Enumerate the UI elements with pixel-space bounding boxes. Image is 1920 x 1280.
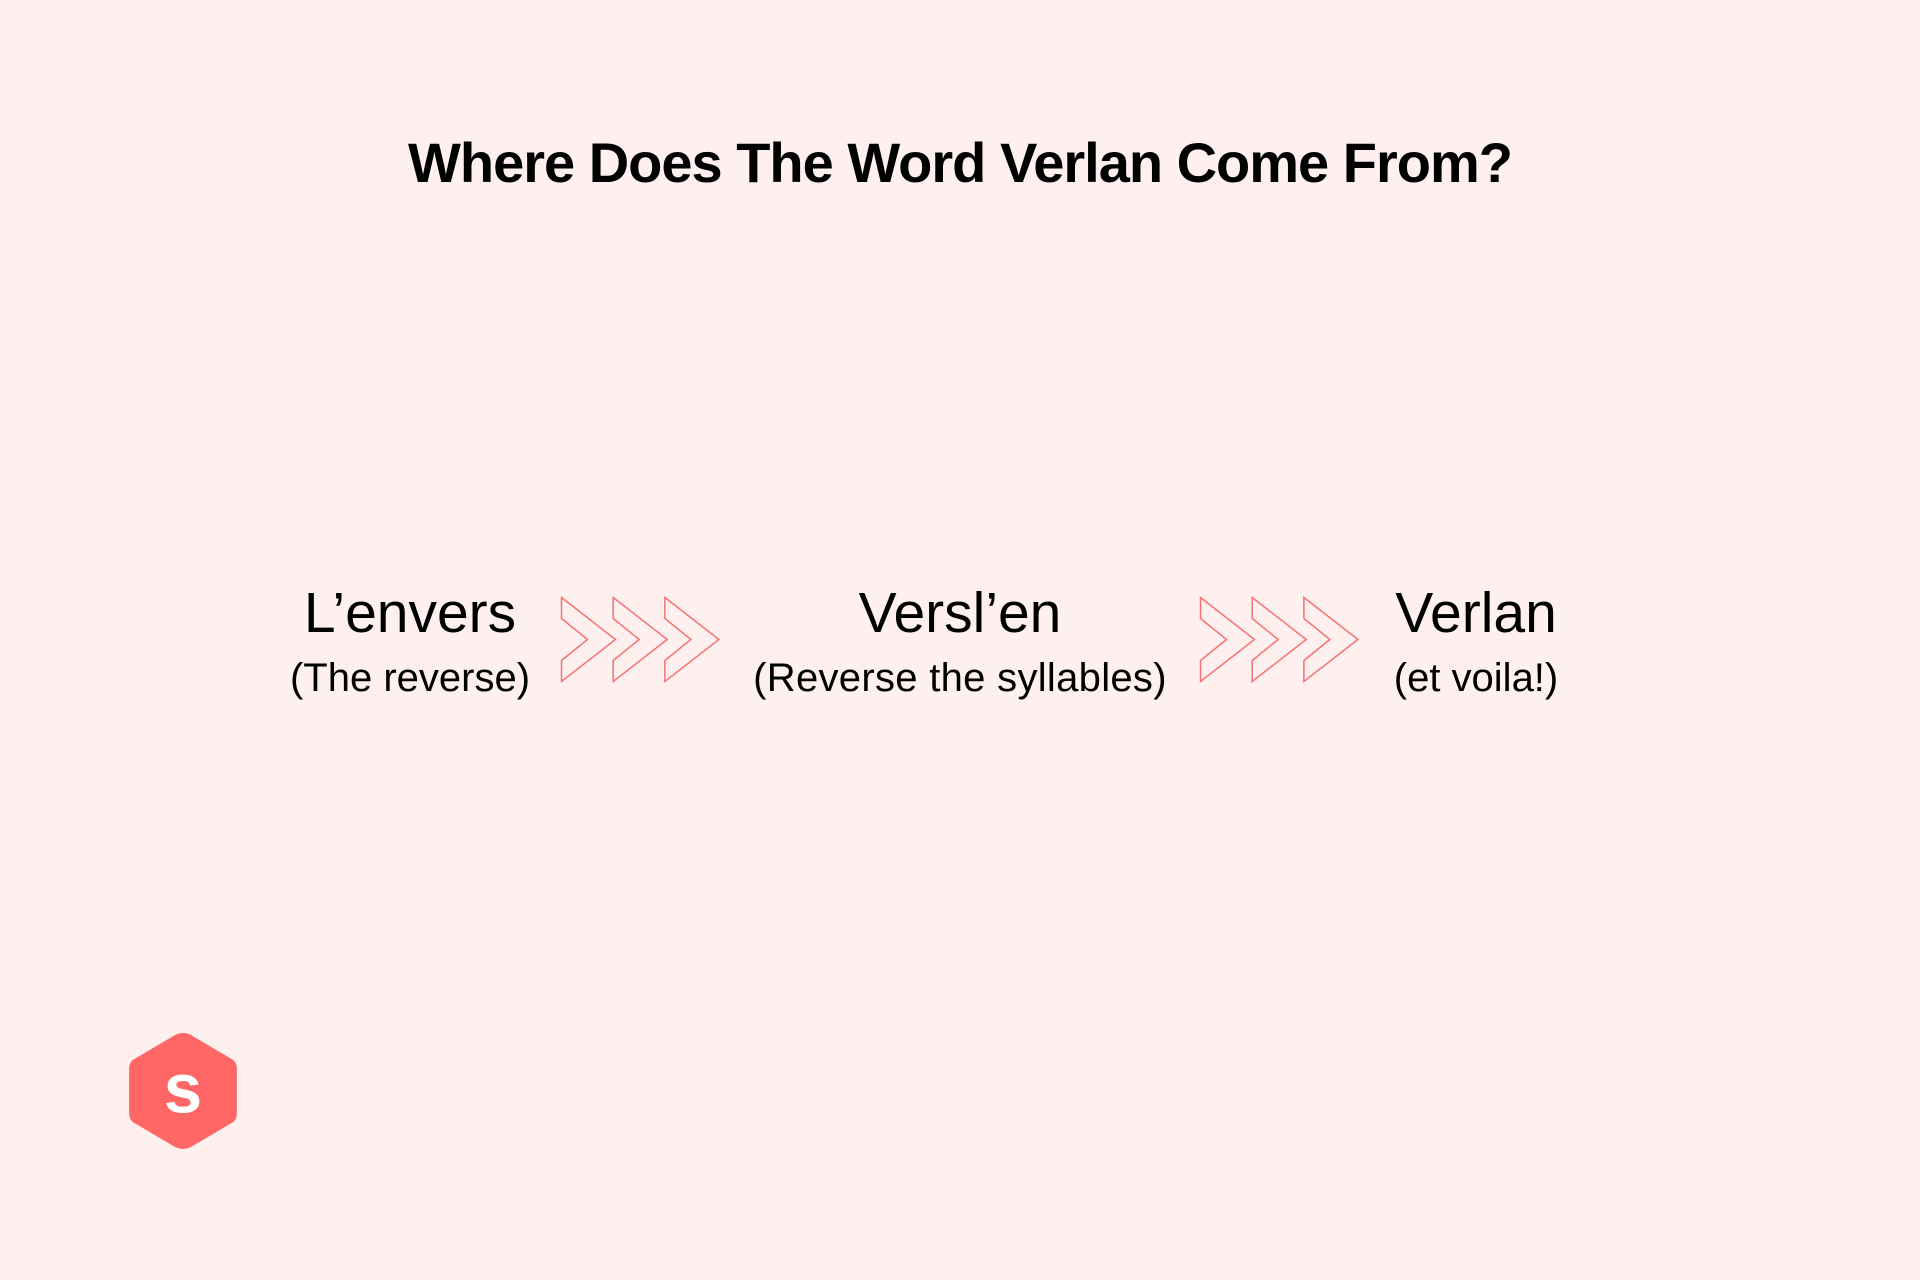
step: L'envers: (The reverse) [290, 656, 530, 700]
step: Verlan [1394, 581, 1558, 700]
step: Verlan: (et voila!) [1394, 656, 1558, 700]
step: Versl'en [753, 581, 1167, 700]
step: Versl'en: (Reverse the syllables) [753, 656, 1167, 700]
arrow: chevrons 1 [560, 596, 720, 683]
step: L'envers: L’envers [304, 581, 516, 645]
logo [129, 1033, 237, 1149]
step: Verlan: Verlan [1395, 581, 1557, 645]
arrow: chevrons 2 [1200, 596, 1359, 683]
logo: s [164, 1049, 202, 1127]
step: Versl'en: Versl’en [859, 581, 1061, 645]
title: Where Does The Word Verlan Come From? [408, 131, 1512, 194]
step: L'envers [290, 581, 530, 700]
